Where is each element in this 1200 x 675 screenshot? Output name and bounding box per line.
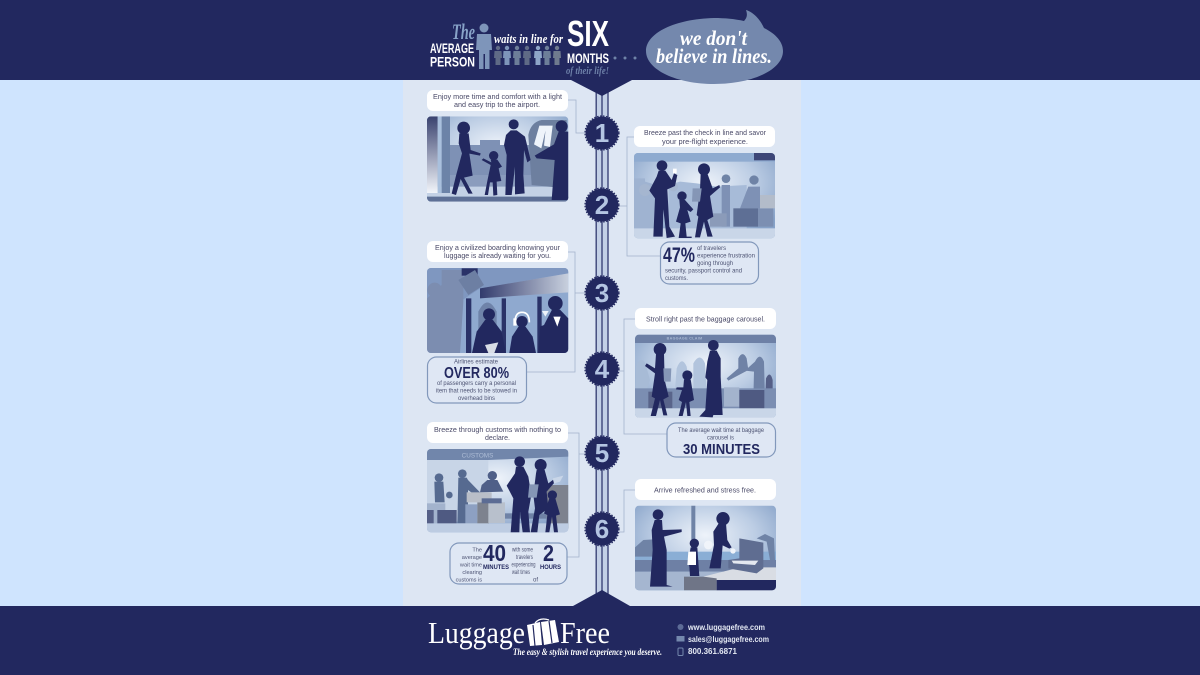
connector lines (526, 100, 667, 557)
stat: 47 percent (660, 242, 758, 284)
step 3 (427, 241, 568, 403)
stat: over 80 percent: Airlines estimate (454, 358, 499, 366)
pill text: step 2: your pre-flight experience. (662, 137, 748, 146)
pill text: step 1: and easy trip to the airport. (454, 100, 540, 109)
header band (0, 0, 1200, 96)
pill text: step 6 (635, 479, 776, 500)
pill text: step 1 (427, 90, 568, 111)
badge 1: 1 (595, 118, 609, 148)
stat: 40 minutes and 2 hours: with some (511, 546, 533, 554)
stat: 40 minutes and 2 hours: 2 (543, 540, 554, 566)
stat: 40 minutes and 2 hours: wait time (459, 562, 482, 568)
stat: 40 minutes and 2 hours: clearing (462, 570, 482, 576)
ellipsis dots (614, 56, 636, 60)
headline: waits in line for: waits in line for (494, 31, 564, 46)
pill text: step 1: Enjoy more time and comfort with a light (433, 92, 563, 101)
badge 2 (585, 188, 619, 222)
central panel (403, 80, 801, 606)
tagline: The easy & stylish travel experience you deserve. (513, 648, 662, 658)
icon: envelope (676, 636, 684, 642)
step 2 (634, 126, 775, 284)
step 4 (635, 308, 776, 458)
illustration: customs hall (427, 449, 568, 532)
step 5 (427, 422, 568, 584)
badge 6: 6 (595, 514, 609, 544)
stat: 40 minutes and 2 hours: travelers (516, 554, 533, 561)
headline: the average person: PERSON (430, 54, 475, 70)
stat: over 80 percent: of passengers carry a personal (437, 380, 516, 387)
stat: 40 minutes and 2 hours: experiencing (512, 562, 536, 568)
stat: 40 minutes and 2 hours: The (472, 548, 482, 554)
stat: 47 percent: 47% (663, 244, 695, 267)
stat: 30 minutes: carousel is (707, 434, 734, 442)
badge 5: 5 (595, 438, 609, 468)
pill text: step 5 (427, 422, 568, 443)
stat: 47 percent: experience frustration (697, 252, 756, 260)
icon: row of seven people (494, 46, 561, 65)
badge 3: 3 (595, 278, 609, 308)
headline: the average person: The (452, 19, 475, 44)
logo wordmark: Luggage (428, 615, 525, 650)
stat: 40 minutes and 2 hours: HOURS (540, 565, 561, 571)
step 6 (635, 479, 776, 590)
headline: the average person: AVERAGE (430, 40, 474, 56)
pill text: step 3 (427, 241, 568, 262)
pill text: step 6: Arrive refreshed and stress free. (654, 486, 756, 494)
stat: 40 minutes and 2 hours: of (533, 576, 538, 584)
pill text: step 2: Breeze past the check in line and savor (644, 128, 766, 137)
badge 3 (585, 276, 619, 310)
stat: 40 minutes and 2 hours (450, 540, 567, 584)
step 1 (427, 90, 568, 202)
badge 1 (585, 116, 619, 150)
headline: six months: of their life! (566, 66, 609, 77)
phone number: 800.361.6871 (688, 646, 737, 656)
stat: 47 percent: of travelers (697, 245, 726, 252)
stat: over 80 percent (428, 357, 526, 403)
stat: 30 minutes: The average wait time at baggage (678, 427, 765, 434)
pill text: step 4: Stroll right past the baggage carousel. (646, 314, 765, 324)
pill text: step 5: Breeze through customs with nothing to (434, 425, 561, 434)
stat: 40 minutes and 2 hours: customs is (456, 578, 482, 584)
pill text: step 2 (634, 126, 775, 147)
email: sales@luggagefree.com (688, 634, 769, 644)
icon: phone (678, 648, 683, 656)
website: www.luggagefree.com (687, 622, 765, 632)
pill text: step 4 (635, 308, 776, 329)
headline: the average person (430, 19, 475, 70)
headline: six months: MONTHS (567, 50, 609, 66)
pill text: step 3: Enjoy a civilized boarding knowing your (435, 243, 560, 252)
stat: over 80 percent: item that needs to be stowed in (436, 388, 518, 394)
stat: 40 minutes and 2 hours: wait times (511, 569, 530, 576)
illustration: check-in hall (634, 153, 775, 238)
icon: suitcase logo (527, 619, 559, 646)
badge 4: 4 (595, 354, 610, 384)
badge 5 (585, 436, 619, 470)
icon: large person (476, 24, 492, 69)
stat: 30 minutes (667, 423, 776, 458)
illustration: family arrives by car (427, 116, 568, 202)
logo wordmark (428, 615, 610, 650)
headline: six months (566, 13, 609, 77)
speech bubble: believe in lines. (656, 44, 772, 68)
badge 4 (585, 352, 619, 386)
illustration: baggage claim: BAGGAGE CLAIM (667, 336, 702, 340)
stat: 47 percent: customs. (665, 275, 688, 282)
stat: 47 percent: security, passport control and (665, 268, 743, 274)
stat: 40 minutes and 2 hours: MINUTES (483, 565, 509, 571)
stat: 40 minutes and 2 hours: average (462, 555, 482, 561)
pill text: step 5: declare. (485, 433, 510, 442)
timeline spine (596, 90, 609, 600)
speech bubble: we don't (680, 26, 748, 50)
stat: over 80 percent: OVER 80% (444, 365, 509, 382)
logo wordmark: Free (560, 615, 610, 650)
illustration: customs hall: CUSTOMS (462, 453, 494, 460)
footer band (0, 590, 1200, 675)
badge 6 (585, 512, 619, 546)
headline: six months: SIX (567, 13, 609, 54)
contact details (676, 622, 769, 656)
illustration: aircraft boarding (427, 268, 568, 353)
speech bubble (646, 10, 783, 84)
number badges (585, 116, 619, 546)
illustration: hotel room (635, 506, 776, 590)
stat: 47 percent: going through (697, 260, 734, 267)
badge 2: 2 (595, 190, 609, 220)
stat: 40 minutes and 2 hours: 40 (483, 540, 506, 566)
stat: 30 minutes: 30 MINUTES (683, 441, 760, 458)
icon: globe (678, 624, 684, 630)
pill text: step 3: luggage is already waiting for you. (444, 251, 551, 260)
illustration: baggage claim (635, 335, 776, 418)
stat: over 80 percent: overhead bins (458, 395, 495, 402)
